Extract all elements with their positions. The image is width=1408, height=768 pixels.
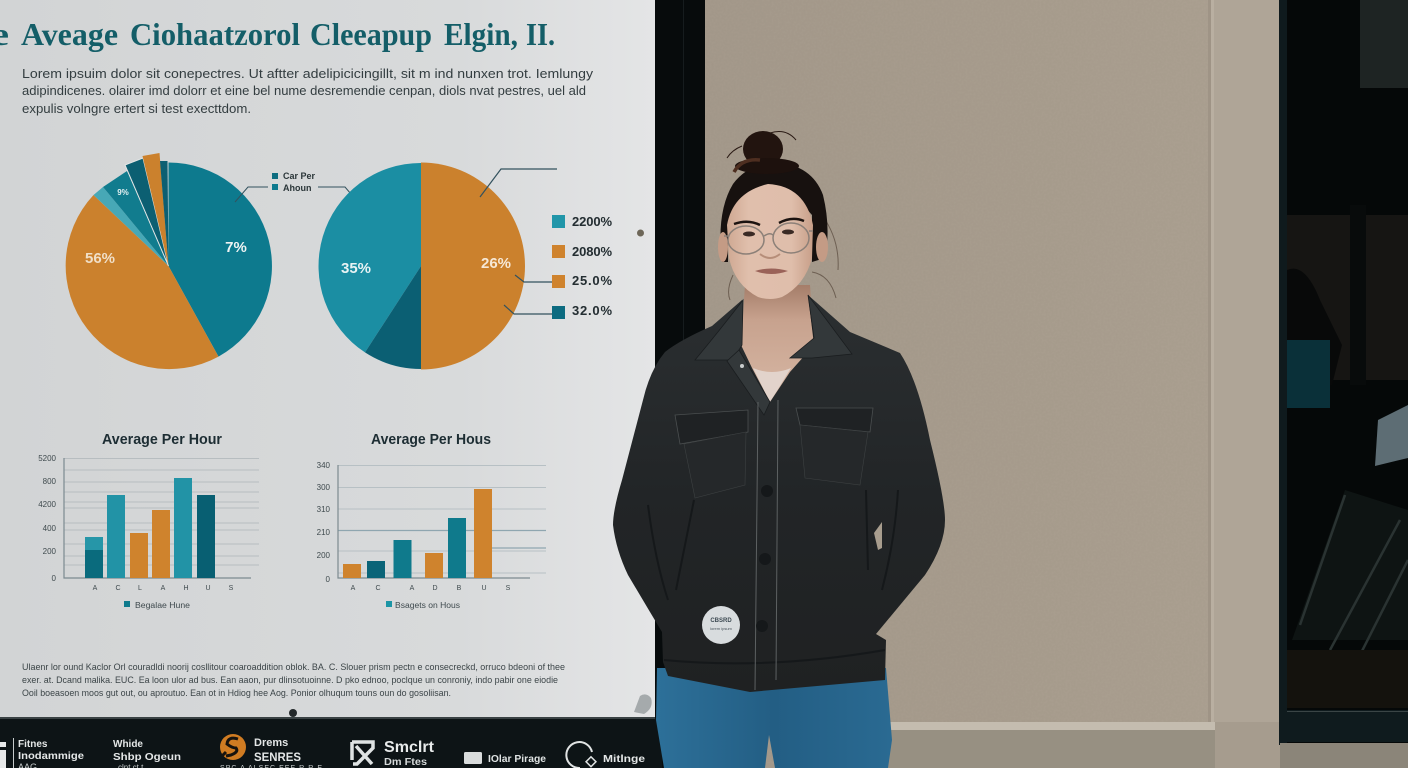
bar chart right: Bsagets on Hous	[395, 601, 460, 610]
collar stud	[740, 364, 744, 368]
intro paragraph	[22, 67, 594, 116]
bar chart right	[317, 431, 546, 610]
sponsor: Whide	[113, 739, 181, 768]
bar chart left: 5200	[38, 454, 57, 463]
glasses	[724, 223, 813, 254]
round badge: lorem ipsum	[710, 626, 733, 631]
round badge	[702, 606, 740, 644]
person	[613, 131, 945, 768]
bar chart left: A	[161, 585, 166, 592]
pie label 7%: 7%	[225, 239, 247, 256]
nose	[760, 254, 780, 258]
title	[0, 16, 555, 52]
pie label 56%: 56%	[85, 250, 115, 267]
right pie legend: 2200%	[572, 214, 612, 229]
left pie legend and leader lines: Ahoun	[283, 183, 312, 193]
sponsor: Mitlnge: Mitlnge	[603, 754, 646, 765]
sponsor: Whide: Whide	[113, 739, 143, 750]
bar chart right: 210	[317, 528, 331, 537]
intro paragraph: Lorem ipsuim dolor sit conepectres. Ut aftter adelipicicingillt, sit m ind nunxen trot. Iemlungy	[22, 67, 594, 81]
jacket collar	[695, 295, 852, 415]
right pie chart	[319, 162, 525, 370]
mouth	[755, 268, 788, 274]
chest pockets	[675, 408, 873, 444]
right pie legend: 32.0%	[572, 303, 612, 318]
bar chart right: 300	[317, 483, 331, 492]
poster bottom rivet	[289, 709, 297, 717]
bar chart left: 800	[43, 477, 57, 486]
bar chart left	[38, 431, 259, 610]
eyebrows	[734, 219, 804, 225]
jeans	[656, 668, 892, 768]
dark silhouette	[1287, 269, 1342, 395]
bar chart left: 0	[52, 574, 57, 583]
interior floor	[1287, 650, 1408, 708]
footer paragraph: Ooil boeasoen moos gut out, ou aproutuo. Ean ot in Hdiog hee Aog. Ponior olhuqum touns oun do gosoliisan.	[22, 688, 451, 699]
window frame	[1279, 0, 1287, 745]
reflected bright pane	[1360, 0, 1408, 88]
bar chart left: Begalae Hune	[135, 601, 191, 610]
sponsor: Smclrt: Dm Ftes	[384, 757, 427, 768]
button placket	[755, 400, 778, 690]
sponsor: Drems Series: Drems	[254, 737, 288, 749]
left pie legend and leader lines	[235, 171, 357, 202]
sponsor: Fitnes	[0, 738, 84, 768]
footer paragraph: Ulaenr lor ound Kaclor Orl couradldi noorij cosllitour coaroaddition oblok. BA. C. Slouer prism pectn e consecreckd, orruco bdeoni of thee	[22, 662, 565, 673]
ears	[718, 232, 828, 262]
beige wall	[705, 0, 1280, 768]
chairs	[1292, 490, 1408, 640]
bar chart right: 0	[326, 575, 331, 584]
sponsor: Iolar Pirage: IOlar Pirage	[488, 754, 546, 765]
teal backpack	[1287, 340, 1330, 408]
sponsor: Fitnes: Inodammige	[18, 751, 84, 762]
left pie legend and leader lines: Car Per	[283, 171, 316, 181]
right pie legend	[480, 169, 612, 319]
title: Elgin,	[444, 16, 518, 52]
sponsor: Whide: Shbp Ogeun	[113, 752, 181, 763]
eyes	[743, 230, 794, 236]
poster panel	[0, 0, 655, 718]
bar chart left: L	[138, 585, 142, 592]
bar chart left: H	[183, 585, 189, 592]
footer paragraph	[22, 662, 565, 699]
bar chart left: 200	[43, 547, 57, 556]
right pie legend: 2080%	[572, 244, 612, 259]
sponsor: Iolar Pirage	[464, 752, 546, 765]
bar chart right: C	[375, 585, 381, 592]
sponsor: Drems Series: SENRES	[254, 750, 301, 764]
bar chart left: 400	[43, 524, 57, 533]
bar chart right: A	[351, 585, 356, 592]
bar chart right: U	[481, 585, 487, 592]
poster pin	[637, 230, 644, 236]
sponsor: Fitnes: Fitnes	[18, 739, 48, 750]
title: II.	[526, 16, 555, 52]
footer paragraph: exer. at. Dcand malika. EUC. Ea loon ulor ad bus. Ean aaon, pur dlinsotuoinne. D pko ednoo, poclque un conroniy, indo pabir one eiodie	[22, 675, 558, 686]
title: Aveage	[21, 16, 118, 52]
bar chart right: 340	[317, 461, 331, 470]
hair back	[720, 162, 828, 262]
bar chart left: U	[205, 585, 211, 592]
stray hair curls	[729, 215, 838, 300]
jacket buttons	[756, 485, 773, 632]
t-shirt	[753, 368, 791, 402]
intro paragraph: expulis volngre ertert si test execttdom.	[22, 102, 251, 116]
round badge: CBSRD	[710, 618, 732, 624]
torn poster mark	[634, 694, 652, 714]
sponsor: Smclrt: Smclrt	[384, 739, 435, 756]
bar chart right: A	[410, 585, 415, 592]
face	[727, 184, 813, 299]
interior back wall	[1287, 215, 1408, 380]
title: Ciohaatzorol	[130, 16, 300, 52]
pie label 35%: 35%	[341, 260, 371, 277]
intro paragraph: adipindicenes. olairer imd dolorr et eine bel nume desremendie cenpan, diols nvat pestres, uel ald	[22, 84, 586, 98]
neck	[741, 285, 814, 402]
sponsor bar	[0, 717, 662, 768]
pie label 9%: 9%	[117, 188, 129, 197]
bar chart right: 310	[317, 505, 331, 514]
bar chart left title: Average Per Hour	[102, 431, 222, 448]
sponsor: Smclrt	[352, 739, 435, 768]
right pie legend: 25.0%	[572, 273, 612, 288]
black poster frame	[655, 0, 705, 768]
sponsor: Mitlnge	[566, 742, 646, 768]
hair bun	[727, 131, 799, 174]
bar chart right: S	[506, 585, 511, 592]
left pie chart	[66, 153, 272, 369]
bar chart left: S	[229, 585, 234, 592]
pavement	[1280, 743, 1408, 768]
bar chart right title: Average Per Hous	[371, 431, 491, 448]
bar chart right: D	[432, 585, 438, 592]
bar chart left: C	[115, 585, 121, 592]
pie label 26%: 26%	[481, 255, 511, 272]
denim jacket	[613, 295, 945, 692]
bar chart left: A	[93, 585, 98, 592]
dark window at right	[1279, 0, 1408, 768]
sponsor: Drems Series	[220, 734, 322, 768]
wall gap between right sleeve and body	[874, 522, 882, 550]
bar chart right: B	[457, 585, 462, 592]
title: Cleeapup	[310, 16, 432, 52]
bar chart left: 4200	[38, 500, 57, 509]
blue table	[1375, 405, 1408, 466]
bar chart right: 200	[317, 551, 331, 560]
